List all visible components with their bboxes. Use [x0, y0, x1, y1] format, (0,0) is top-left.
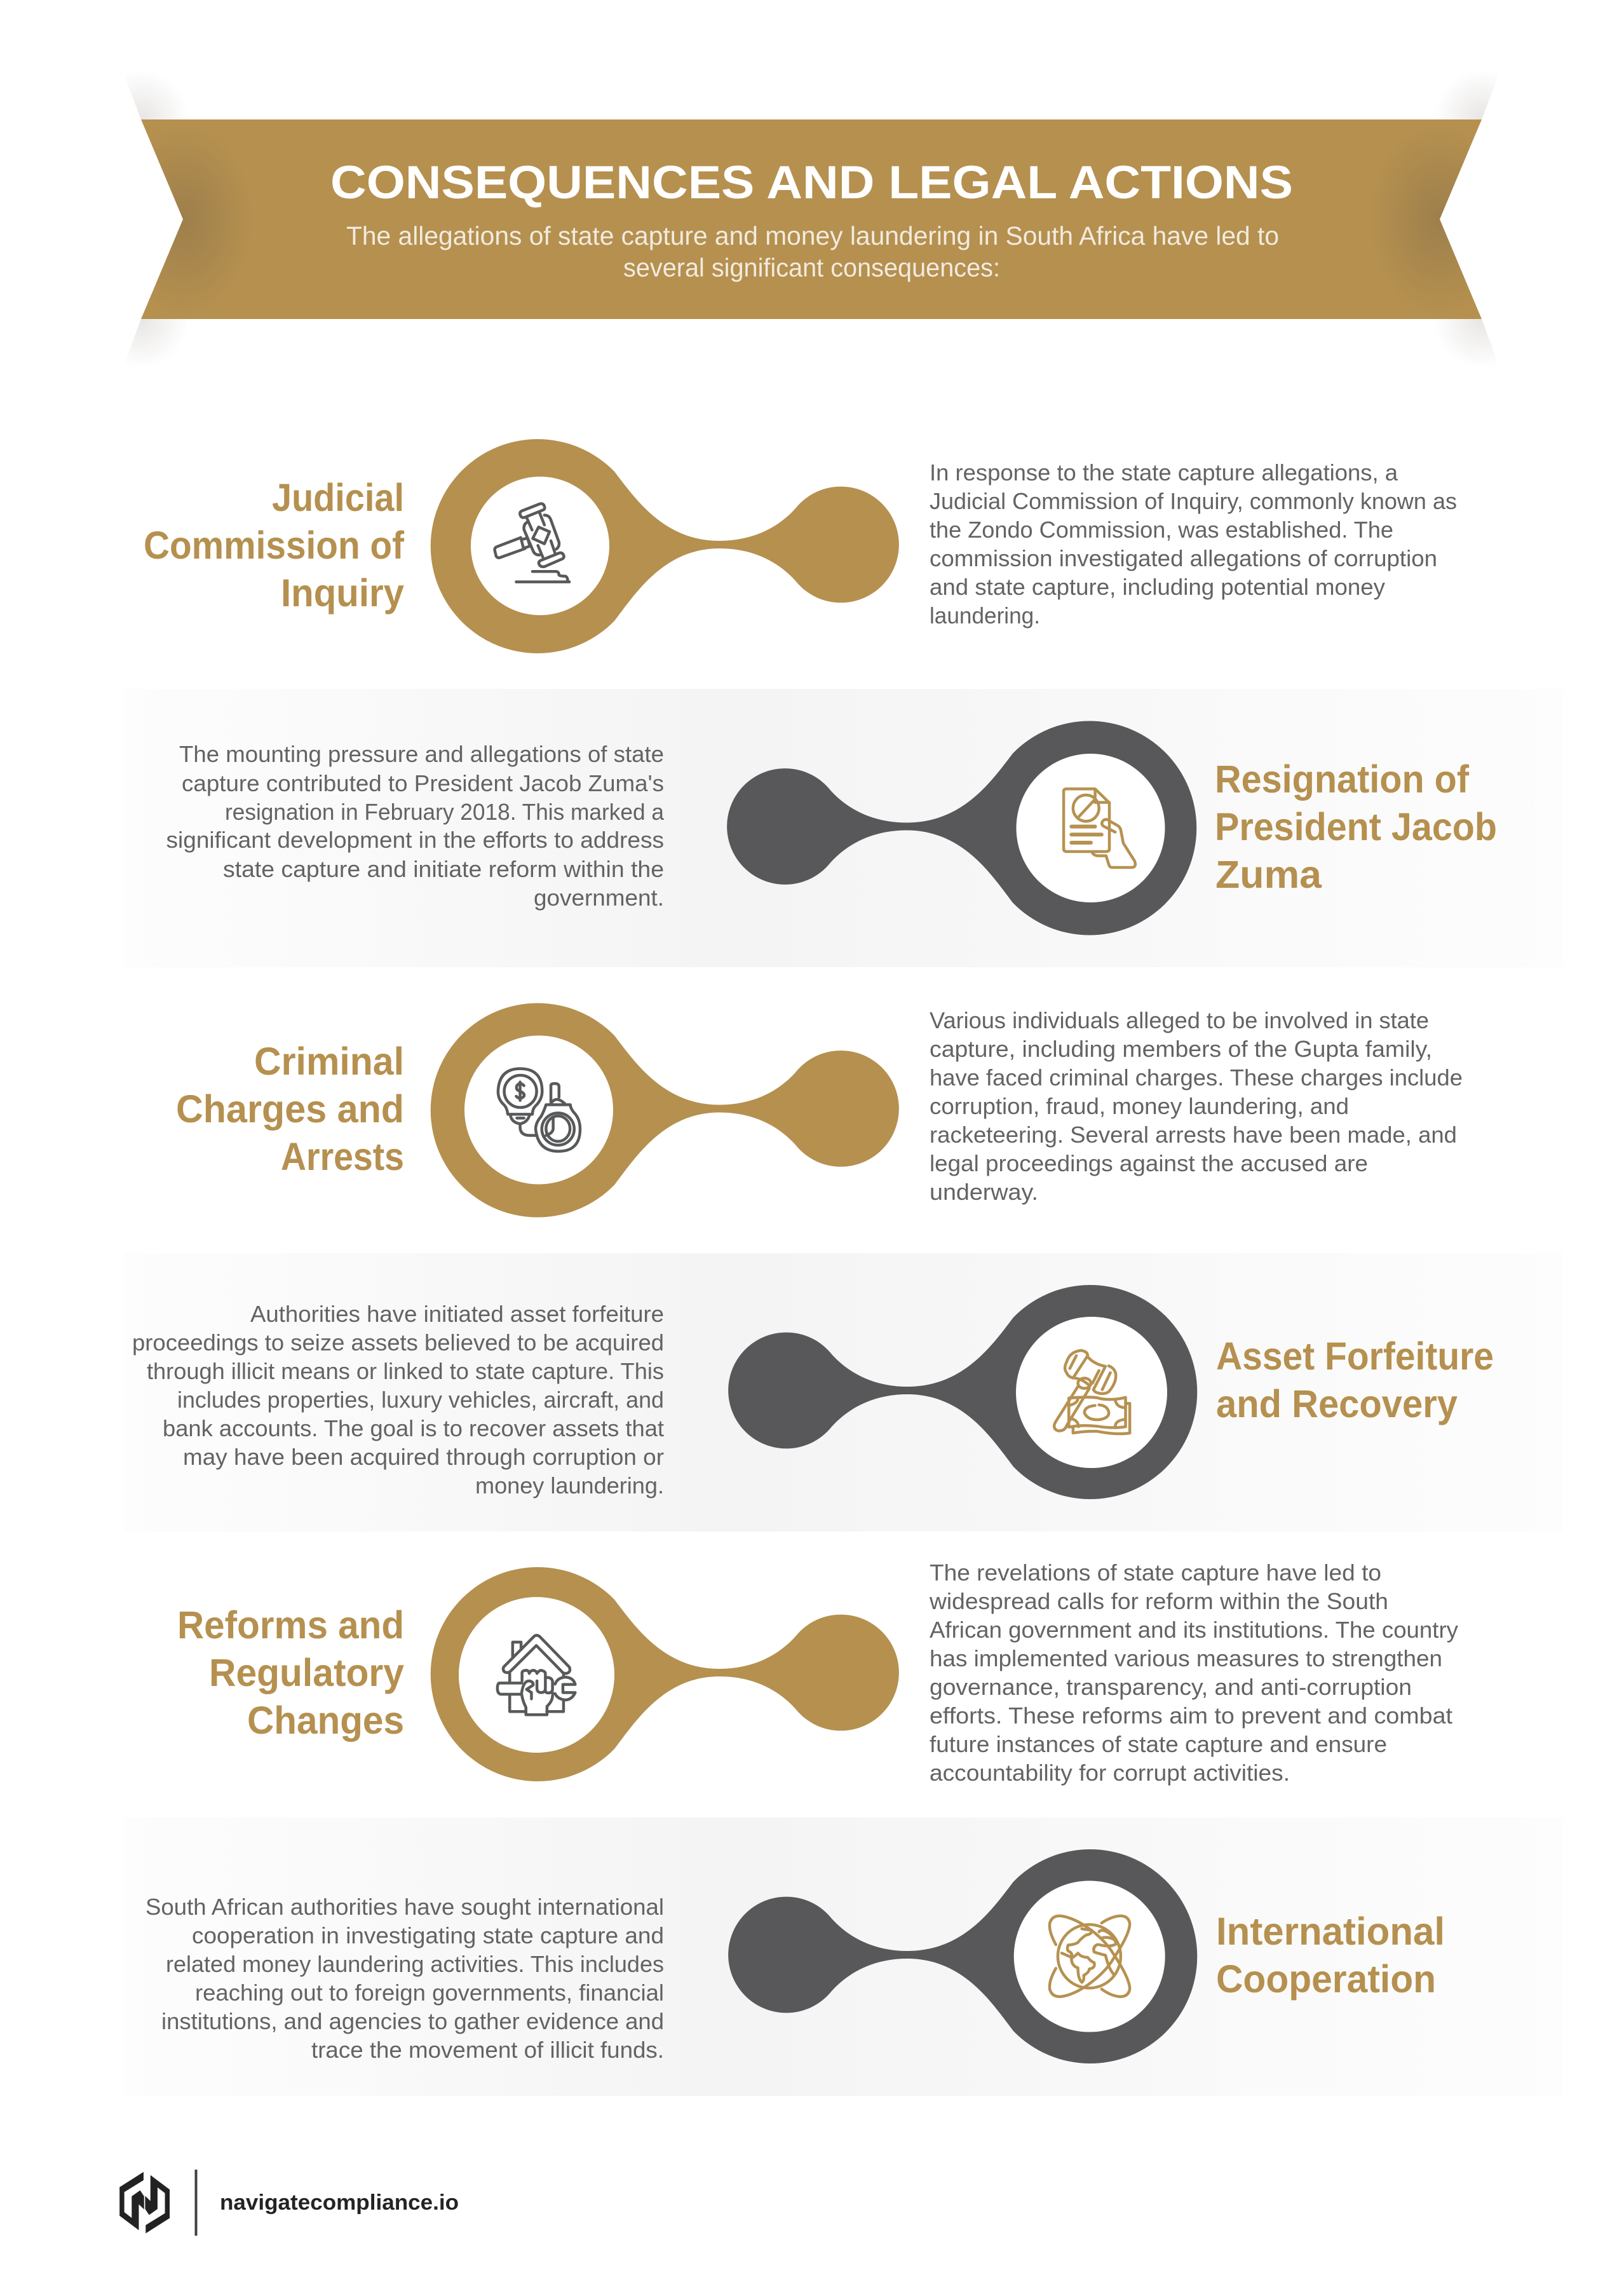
icon background — [1016, 1317, 1167, 1468]
description — [929, 1560, 1458, 1786]
description — [930, 1007, 1463, 1205]
description: government. — [534, 885, 664, 911]
heading: President Jacob — [1215, 805, 1497, 848]
description: capture contributed to President Jacob Zuma's — [182, 770, 664, 796]
heading: Zuma — [1215, 853, 1322, 896]
heading: Changes — [247, 1699, 404, 1742]
description: corruption, fraud, money laundering, and — [930, 1093, 1349, 1119]
panel: Judicial Commission of Inquiry — [144, 439, 1457, 653]
website: navigatecompliance.io — [220, 2191, 459, 2215]
icon background — [464, 1036, 613, 1185]
connector shape — [431, 439, 899, 653]
description: includes properties, luxury vehicles, aircraft, and — [177, 1387, 664, 1413]
description: has implemented various measures to strengthen — [930, 1645, 1442, 1671]
description: resignation in February 2018. This marked a — [225, 799, 665, 825]
panel: International Cooperation — [124, 1818, 1563, 2096]
description — [166, 741, 665, 911]
heading — [1216, 1335, 1494, 1425]
background band — [124, 1818, 1563, 2096]
heading: Resignation of — [1215, 758, 1470, 801]
description: African government and its institutions. The country — [930, 1617, 1458, 1643]
description: cooperation in investigating state capture and — [192, 1922, 664, 1948]
description: future instances of state capture and ensure — [930, 1731, 1387, 1757]
icon background — [1017, 754, 1165, 902]
subtitle: several significant consequences: — [623, 253, 1000, 282]
description: may have been acquired through corruption or — [183, 1444, 664, 1470]
description: In response to the state capture allegations, a — [930, 459, 1398, 486]
description: bank accounts. The goal is to recover assets that — [163, 1415, 664, 1441]
title banner — [123, 71, 1500, 369]
heading: Asset Forfeiture — [1216, 1335, 1494, 1378]
subtitle — [346, 221, 1279, 282]
description: reaching out to foreign governments, financial — [195, 1980, 664, 2006]
connector shape — [431, 1567, 899, 1781]
heading — [144, 476, 405, 615]
heading: and Recovery — [1216, 1382, 1458, 1425]
heading: Inquiry — [281, 571, 404, 615]
connector shape — [727, 721, 1196, 935]
icon: house, hand and wrench — [497, 1635, 575, 1715]
description: governance, transparency, and anti-corruption — [930, 1674, 1412, 1700]
heading: Judicial — [272, 476, 404, 519]
description: have faced criminal charges. These charges include — [930, 1064, 1463, 1091]
description: The mounting pressure and allegations of state — [179, 741, 664, 767]
description: Authorities have initiated asset forfeiture — [250, 1301, 664, 1327]
background band — [124, 689, 1563, 967]
description: commission investigated allegations of corruption — [930, 545, 1437, 571]
description: trace the movement of illicit funds. — [311, 2037, 664, 2063]
description: and state capture, including potential money — [930, 574, 1385, 600]
title: CONSEQUENCES AND LEGAL ACTIONS — [330, 157, 1293, 208]
heading: Commission of — [144, 524, 405, 567]
icon: handcuffs with dollar — [498, 1069, 580, 1152]
description — [132, 1301, 664, 1499]
footer — [119, 2170, 459, 2236]
panel: Resignation of President Jacob Zuma — [124, 689, 1563, 967]
icon: company logo — [119, 2172, 170, 2233]
panel: Asset Forfeiture and Recovery — [124, 1253, 1563, 1532]
icon: globe with orbits — [1050, 1916, 1130, 1997]
connector shape — [431, 1003, 899, 1217]
heading: Arrests — [281, 1135, 404, 1178]
description: racketeering. Several arrests have been made, and — [930, 1122, 1457, 1148]
description: significant development in the efforts to address — [166, 827, 664, 853]
heading: Cooperation — [1216, 1957, 1436, 2001]
description: The revelations of state capture have led to — [930, 1560, 1381, 1586]
icon: document in hand — [1064, 789, 1135, 867]
background band — [124, 1253, 1563, 1532]
description: Judicial Commission of Inquiry, commonly known as — [930, 488, 1457, 514]
panel: Criminal Charges and Arrests — [176, 1003, 1463, 1217]
icon: gavel and money — [1054, 1350, 1130, 1434]
heading: International — [1216, 1910, 1445, 1953]
description: accountability for corrupt activities. — [930, 1760, 1290, 1786]
description: through illicit means or linked to state capture. This — [147, 1358, 664, 1384]
description — [930, 459, 1457, 629]
description — [145, 1894, 664, 2063]
heading — [177, 1603, 404, 1742]
description: institutions, and agencies to gather evidence and — [161, 2008, 664, 2034]
divider — [194, 2170, 197, 2236]
description: Various individuals alleged to be involved in state — [930, 1007, 1429, 1033]
panel: Reforms and Regulatory Changes — [177, 1560, 1458, 1786]
subtitle: The allegations of state capture and money laundering in South Africa have led to — [346, 221, 1279, 250]
description: legal proceedings against the accused are — [930, 1150, 1368, 1176]
heading: Criminal — [254, 1040, 404, 1083]
description: related money laundering activities. This includes — [166, 1951, 664, 1977]
heading — [1215, 758, 1497, 896]
description: South African authorities have sought international — [145, 1894, 664, 1920]
description: proceedings to seize assets believed to be acquired — [132, 1329, 664, 1356]
heading — [176, 1040, 404, 1178]
heading: Charges and — [176, 1087, 404, 1131]
connector shape — [728, 1285, 1197, 1499]
description: underway. — [930, 1179, 1038, 1205]
icon background — [1014, 1881, 1165, 2032]
description: efforts. These reforms aim to prevent and combat — [930, 1703, 1452, 1729]
description: laundering. — [930, 602, 1040, 629]
heading — [1216, 1910, 1445, 2001]
icon background — [471, 477, 609, 615]
icon background — [459, 1597, 614, 1753]
description: capture, including members of the Gupta family, — [930, 1036, 1432, 1062]
description: widespread calls for reform within the South — [929, 1588, 1388, 1614]
description: state capture and initiate reform within the — [223, 856, 664, 882]
description: money laundering. — [475, 1472, 664, 1499]
connector shape — [728, 1849, 1197, 2063]
icon: gavel — [495, 503, 569, 582]
heading: Reforms and — [177, 1603, 404, 1647]
heading: Regulatory — [209, 1651, 404, 1694]
description: the Zondo Commission, was established. The — [930, 517, 1393, 543]
